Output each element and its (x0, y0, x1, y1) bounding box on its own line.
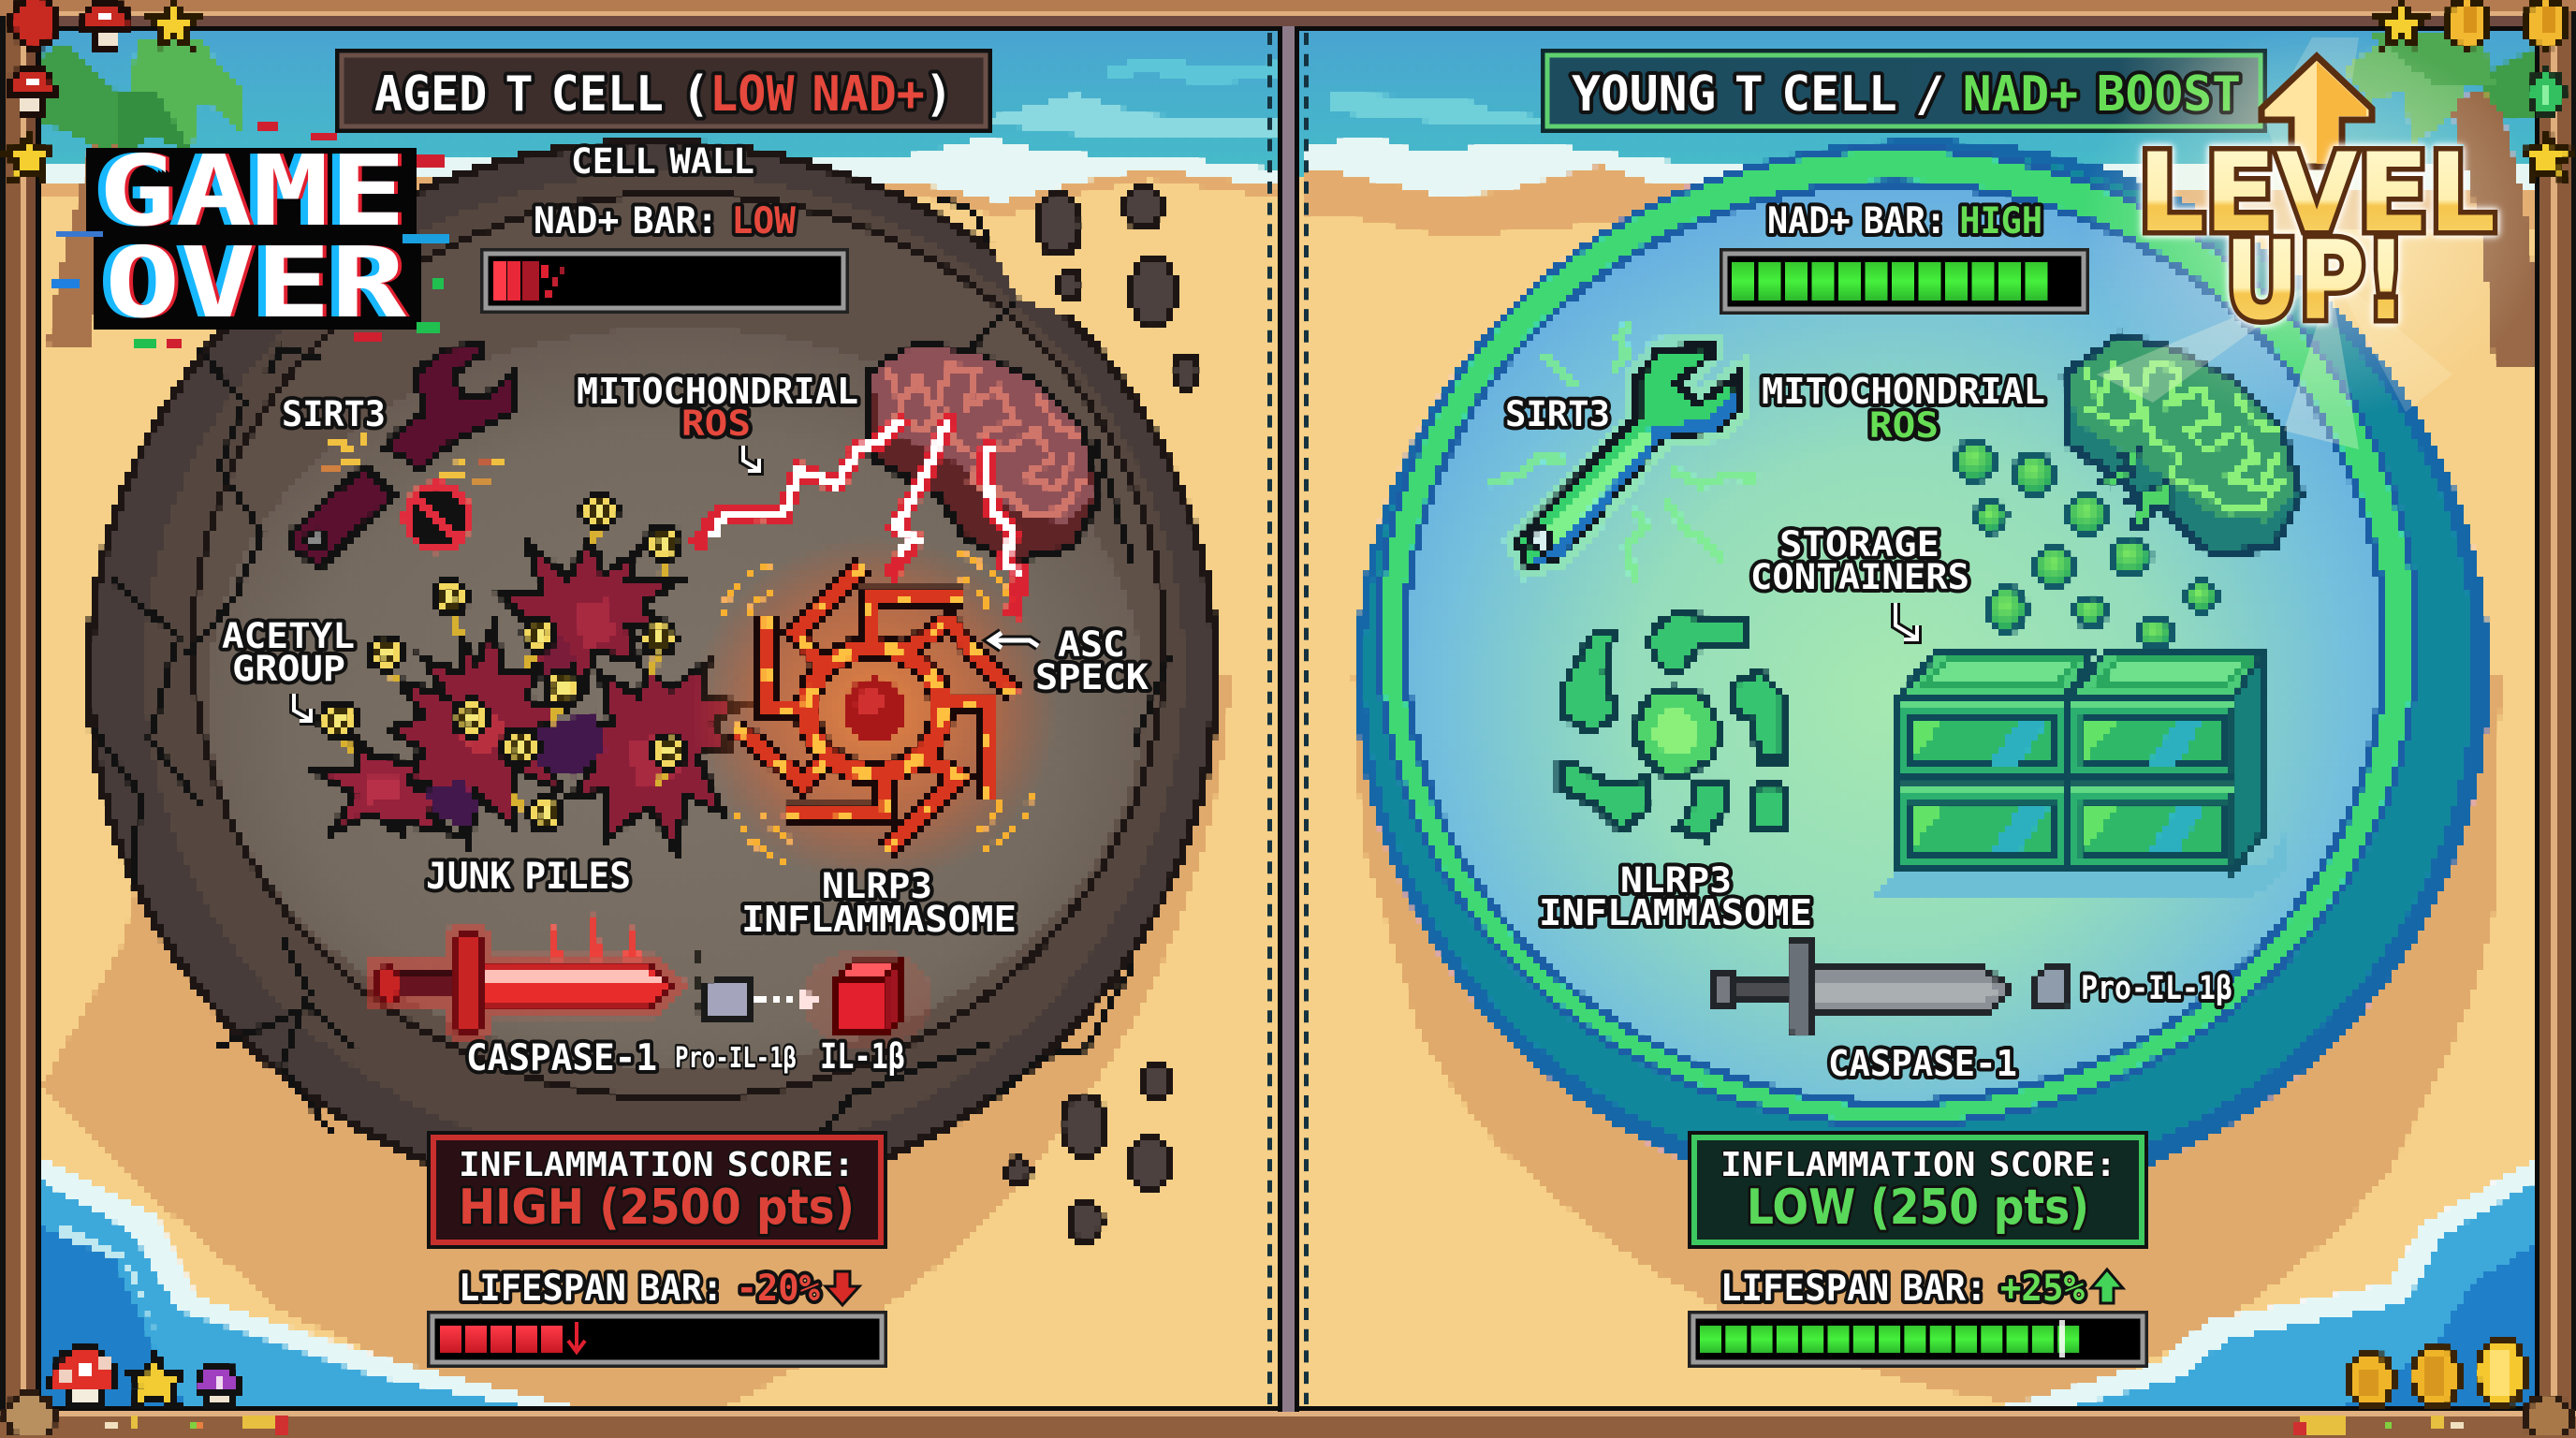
icon: IL-1b red cube (801, 948, 932, 1049)
title: aged T cell: AGED T CELL (LOW NAD+) (374, 66, 953, 123)
icon: right palm tree (2345, 31, 2537, 365)
label: ASC speck: SPECK (1035, 657, 1149, 697)
icon: star bottom left (129, 1356, 183, 1406)
icon: disassembled NLRP3 pieces (1559, 614, 1785, 840)
icon: debris bottom left (107, 1414, 290, 1435)
label: mitochondrial ROS young: ROS (1869, 405, 1939, 446)
label: cell wall: CELL WALL (571, 141, 754, 182)
group: aged cell enzyme row (375, 914, 932, 1049)
label: NLRP3 inflammasome young (1539, 860, 1812, 933)
glitch pixels (51, 122, 449, 348)
icon: acetyl group tags (320, 493, 686, 830)
icon: level up arrow (2261, 56, 2372, 167)
icon: star top right (2376, 0, 2426, 47)
icon: ROS lightning bolts (695, 415, 1022, 618)
icon: coin corner (2525, 0, 2567, 47)
label: NLRP3 inflammasome aged (741, 866, 1017, 940)
icon: coin bottom right one (2349, 1354, 2393, 1406)
panel: left beach background (0, 0, 1281, 1438)
label: ASC speck: ASC (1058, 624, 1125, 665)
label: ASC speck (1035, 624, 1149, 697)
icon: pro-IL-1b inactive cube (2036, 969, 2069, 1007)
panel: young cell (1355, 139, 2490, 1211)
panel: aged cell (85, 139, 1220, 1210)
icon: debris rocks (1007, 187, 1199, 1242)
panel: aged title bar (335, 49, 992, 133)
callout: level up (2138, 130, 2496, 345)
callout: level up: UP! (2225, 218, 2407, 345)
icon: coin bottom left (6, 1394, 54, 1438)
callout: game over: OVER (105, 226, 406, 340)
label: caspase-1 young: CASPASE-1 (1828, 1043, 2017, 1084)
label: storage containers: STORAGE (1779, 524, 1939, 565)
label: mitochondrial ROS aged: ROS (681, 404, 751, 444)
label: mitochondrial ROS young (1762, 371, 2045, 446)
icon: green metabolite dots (1955, 442, 2216, 648)
text: aged score: INFLAMMATION SCORE: (459, 1146, 855, 1184)
text: young score: INFLAMMATION SCORE: (1720, 1146, 2116, 1184)
icon: ROS pointer arrow aged (743, 446, 759, 471)
label: lifespan bar aged: LIFESPAN BAR: -20% (459, 1268, 820, 1310)
icon: mushroom left (7, 67, 54, 114)
label: NLRP3 inflammasome aged: INFLAMMASOME (741, 899, 1017, 940)
label: caspase-1 aged: CASPASE-1 (466, 1037, 657, 1079)
icon: red gem top left (12, 0, 57, 47)
title: young T cell: YOUNG T CELL / NAD+ BOOST (1572, 66, 2241, 123)
cell wall cracks (94, 197, 1170, 1133)
label: acetyl group: GROUP (232, 649, 345, 689)
icon: storage pointer arrow (1895, 603, 1917, 639)
label: NAD+ bar high: NAD+ BAR: HIGH (1767, 200, 2042, 242)
callout: game over: GAME (98, 134, 406, 248)
icon: acetyl pointer arrow (294, 694, 311, 721)
group: aged cell traced contents (294, 343, 1100, 884)
group: young cell sword (1713, 942, 2069, 1035)
icon: broken wrench SIRT3 (294, 346, 515, 566)
label: NLRP3 inflammasome aged: NLRP3 (822, 866, 932, 906)
text: young score (1720, 1146, 2116, 1236)
text: aged score (459, 1146, 855, 1236)
bar: young lifespan (1688, 1311, 2148, 1368)
panel: young inflammation score (1688, 1131, 2148, 1249)
icon: coin bottom right corner (2525, 1396, 2570, 1438)
panel: right beach background (1295, 0, 2576, 1438)
bar: aged NAD+ low (480, 248, 849, 314)
label: acetyl group (222, 616, 355, 689)
callout: level up: LEVEL (2138, 130, 2496, 257)
icon: star top left (149, 0, 199, 47)
label: mitochondrial ROS aged (577, 371, 858, 444)
bar: young NAD+ high (1720, 248, 2089, 315)
icon: ASC pointer arrow (990, 633, 1038, 648)
panel: aged inflammation score (427, 1131, 887, 1249)
label: storage containers (1750, 524, 1969, 597)
icon: debris bottom right (2293, 1418, 2464, 1436)
icon: star right (2523, 133, 2573, 180)
icon: glowing SIRT3 wrench (1490, 322, 1759, 580)
label: IL-1b: IL-1β (820, 1036, 905, 1077)
label: mitochondrial ROS aged: MITOCHONDRIAL (577, 371, 858, 412)
label: pro-IL-1b aged: Pro-IL-1β (675, 1042, 797, 1075)
center divider (1269, 26, 1307, 1412)
label: junk piles: JUNK PILES (426, 856, 631, 898)
icon: green gem (2529, 71, 2563, 116)
text: young score: LOW (250 pts) (1747, 1180, 2089, 1236)
text: aged score: HIGH (2500 pts) (459, 1180, 855, 1236)
bar: aged lifespan (427, 1311, 887, 1368)
label: mitochondrial ROS young: MITOCHONDRIAL (1762, 371, 2045, 412)
icon: dormant caspase-1 sword (1713, 942, 2011, 1035)
label: SIRT3 young: SIRT3 (1505, 394, 1610, 434)
icon: ASC speck NLRP3 inflammasome (692, 536, 1058, 884)
icon: healthy mitochondrion (2065, 335, 2301, 555)
icon: green up arrow (2091, 1269, 2123, 1303)
icon: mushroom bottom left (51, 1347, 117, 1408)
label: lifespan bar young: LIFESPAN BAR: +25% (1720, 1268, 2085, 1310)
label: acetyl group: ACETYL (222, 616, 355, 656)
effect: level up glow beams (2078, 28, 2546, 449)
label: SIRT3 aged: SIRT3 (282, 394, 386, 434)
panel: young title bar (1541, 49, 2267, 133)
label: NLRP3 inflammasome young: NLRP3 (1620, 860, 1732, 901)
callout: game over (51, 122, 449, 348)
group: young cell traced contents (1490, 322, 2301, 895)
icon: sparks (324, 433, 505, 488)
label: NAD+ bar low: NAD+ BAR: LOW (534, 200, 796, 242)
icon: coin top right (2447, 0, 2488, 47)
label: storage containers: CONTAINERS (1750, 557, 1969, 597)
icon: left palm tree (41, 37, 245, 346)
icon: shadow under storage containers (1874, 832, 2285, 895)
icon: star left (3, 133, 53, 180)
label: NLRP3 inflammasome young: INFLAMMASOME (1539, 892, 1812, 933)
icon: mushroom top (82, 2, 131, 47)
icon: coin bottom right three (2477, 1339, 2525, 1406)
icon: junk piles (314, 536, 746, 851)
icon: pro-IL-1b cube and arrow (700, 948, 819, 1021)
icon: red down arrow (826, 1271, 859, 1305)
icon: storage containers (1898, 652, 2266, 872)
label: pro-IL-1b young: Pro-IL-1β (2081, 970, 2232, 1007)
icon: coin bottom right two (2411, 1346, 2460, 1406)
icon: purple mushroom (197, 1365, 241, 1408)
icon: red caspase-1 sword (375, 914, 678, 1034)
icon: mitochondrion damaged (867, 343, 1100, 561)
